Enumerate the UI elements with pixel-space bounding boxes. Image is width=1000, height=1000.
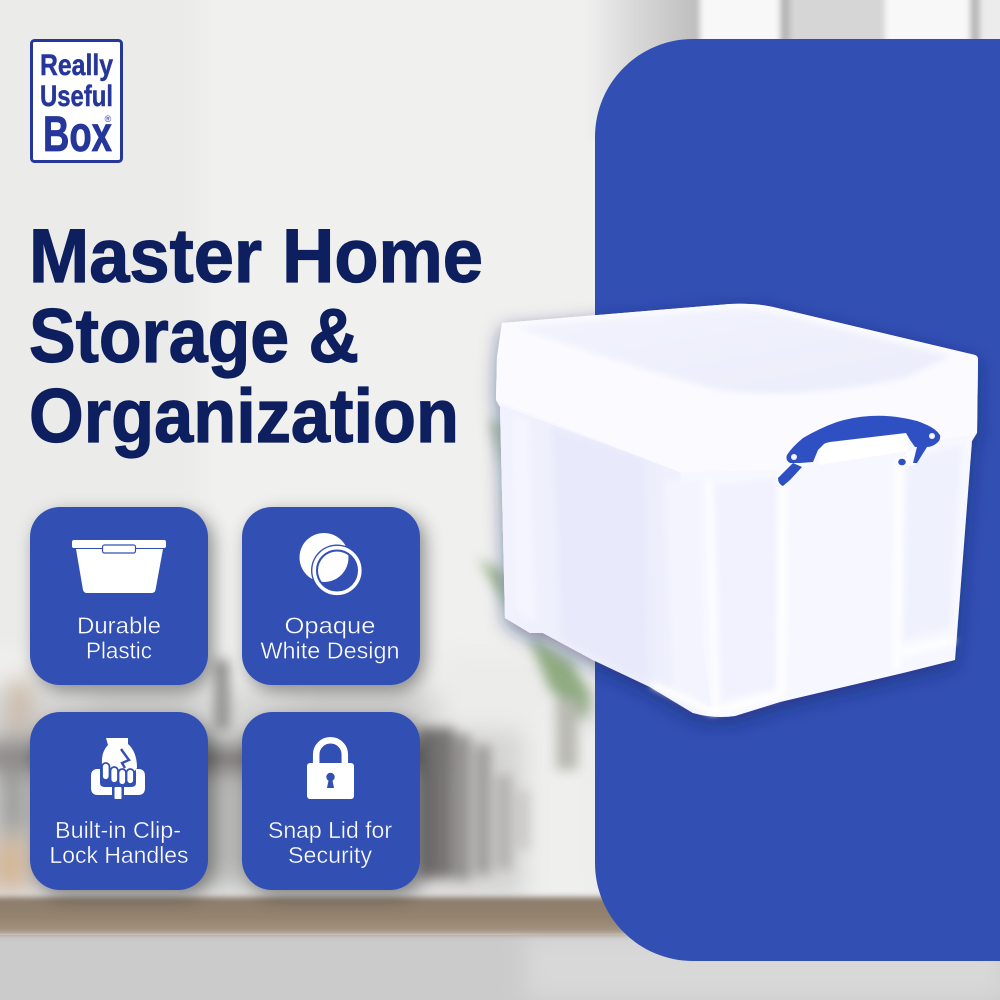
box ribs (512, 415, 962, 712)
box lid top recess (517, 309, 950, 393)
box left side (500, 405, 712, 714)
logo: Really Useful Box: Box (43, 106, 112, 162)
label: Snap Lid for Security: Security (288, 842, 372, 868)
label: Opaque White Design: Opaque (284, 612, 376, 638)
box lid (496, 304, 978, 472)
title (29, 214, 483, 459)
label: Durable Plastic: Plastic (86, 638, 152, 664)
product photo: white storage box (496, 304, 978, 717)
logo: Really Useful Box: Really (40, 49, 113, 82)
title: Storage & (29, 294, 359, 379)
label: Built-in Clip-Lock Handles: Lock Handles (50, 842, 188, 868)
icon: hand gripping handle (91, 738, 145, 799)
box handle backing (818, 432, 915, 467)
logo: Really Useful Box: ® (105, 114, 112, 124)
card: durable plastic (30, 507, 208, 685)
logo: Really Useful Box (32, 40, 122, 162)
panel: blue background panel (595, 39, 1000, 961)
label: Opaque White Design: White Design (260, 638, 400, 664)
card: clip-lock handles (30, 712, 208, 890)
icon: plastic tub (72, 540, 166, 593)
logo: Really Useful Box: Useful (40, 80, 113, 113)
label: Snap Lid for Security: Snap Lid for (268, 817, 392, 843)
title: Master Home (29, 214, 483, 299)
card: snap lid for security (242, 712, 420, 890)
label: Built-in Clip-Lock Handles: Built-in Clip- (55, 817, 181, 843)
box handle (778, 416, 940, 486)
icon: padlock (307, 740, 354, 799)
box silhouette with shadow (496, 304, 978, 717)
label: Durable Plastic: Durable (77, 612, 161, 638)
title: Organization (29, 374, 459, 459)
icon: overlapping circles (300, 533, 363, 596)
card: opaque white design (242, 507, 420, 685)
